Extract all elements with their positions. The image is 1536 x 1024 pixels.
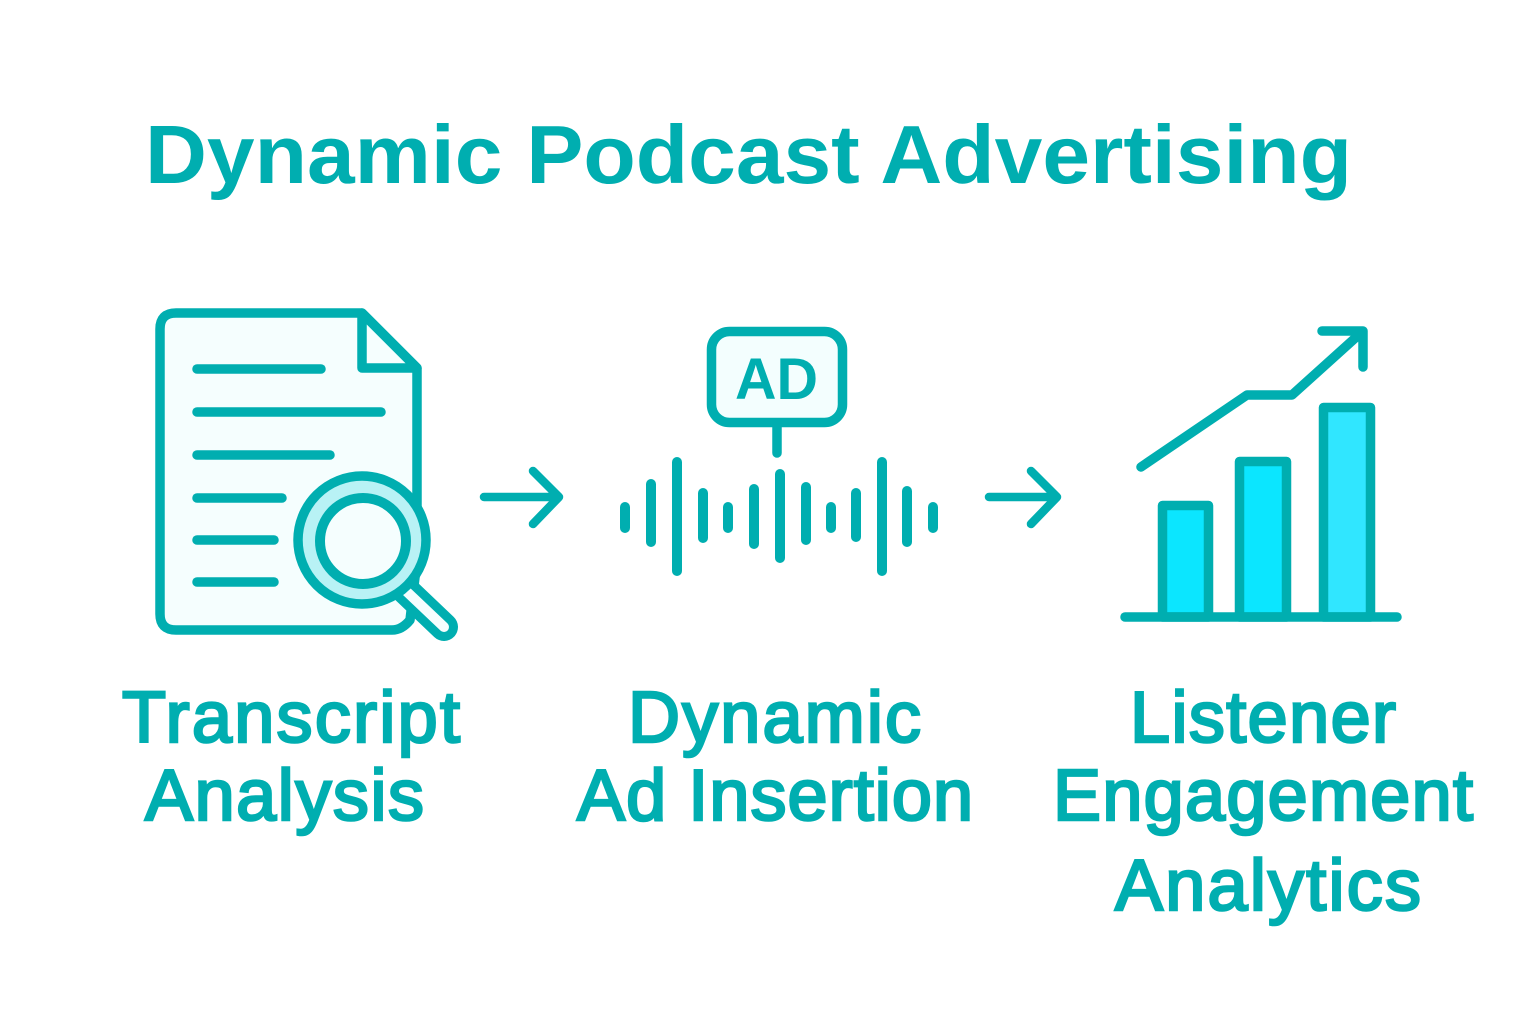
trend arrow xyxy=(1141,331,1363,467)
AD sign xyxy=(712,332,842,453)
label: Dynamic Ad Insertion: Ad Insertion xyxy=(577,756,973,836)
label: Listener Engagement Analytics xyxy=(1053,678,1473,926)
arrow: transcript to ad insertion xyxy=(484,471,559,524)
audio waveform xyxy=(625,462,933,571)
label: Dynamic Ad Insertion xyxy=(577,678,973,836)
icon: AD sign over waveform xyxy=(625,332,933,571)
label: Dynamic Ad Insertion: Dynamic xyxy=(628,678,921,758)
label: Listener Engagement Analytics: Listener xyxy=(1130,678,1396,758)
document text lines xyxy=(197,369,381,582)
label: Listener Engagement Analytics: Engagement xyxy=(1053,756,1473,836)
magnifier lens xyxy=(298,476,426,604)
title: Dynamic Podcast Advertising xyxy=(145,108,1352,201)
label: Transcript Analysis: Analysis xyxy=(145,756,424,836)
document page xyxy=(160,313,417,630)
AD sign: AD xyxy=(735,347,818,412)
label: Listener Engagement Analytics: Analytics xyxy=(1115,846,1421,926)
bars xyxy=(1162,408,1370,617)
arrow: ad insertion to analytics xyxy=(989,471,1057,524)
label: Transcript Analysis: Transcript xyxy=(122,678,460,758)
icon: rising bar chart xyxy=(1125,331,1397,617)
icon: transcript document with magnifying glass xyxy=(160,313,444,630)
chart baseline xyxy=(1125,612,1397,622)
page fold xyxy=(362,313,417,368)
label: Transcript Analysis xyxy=(122,678,460,836)
magnifier handle xyxy=(402,587,444,627)
